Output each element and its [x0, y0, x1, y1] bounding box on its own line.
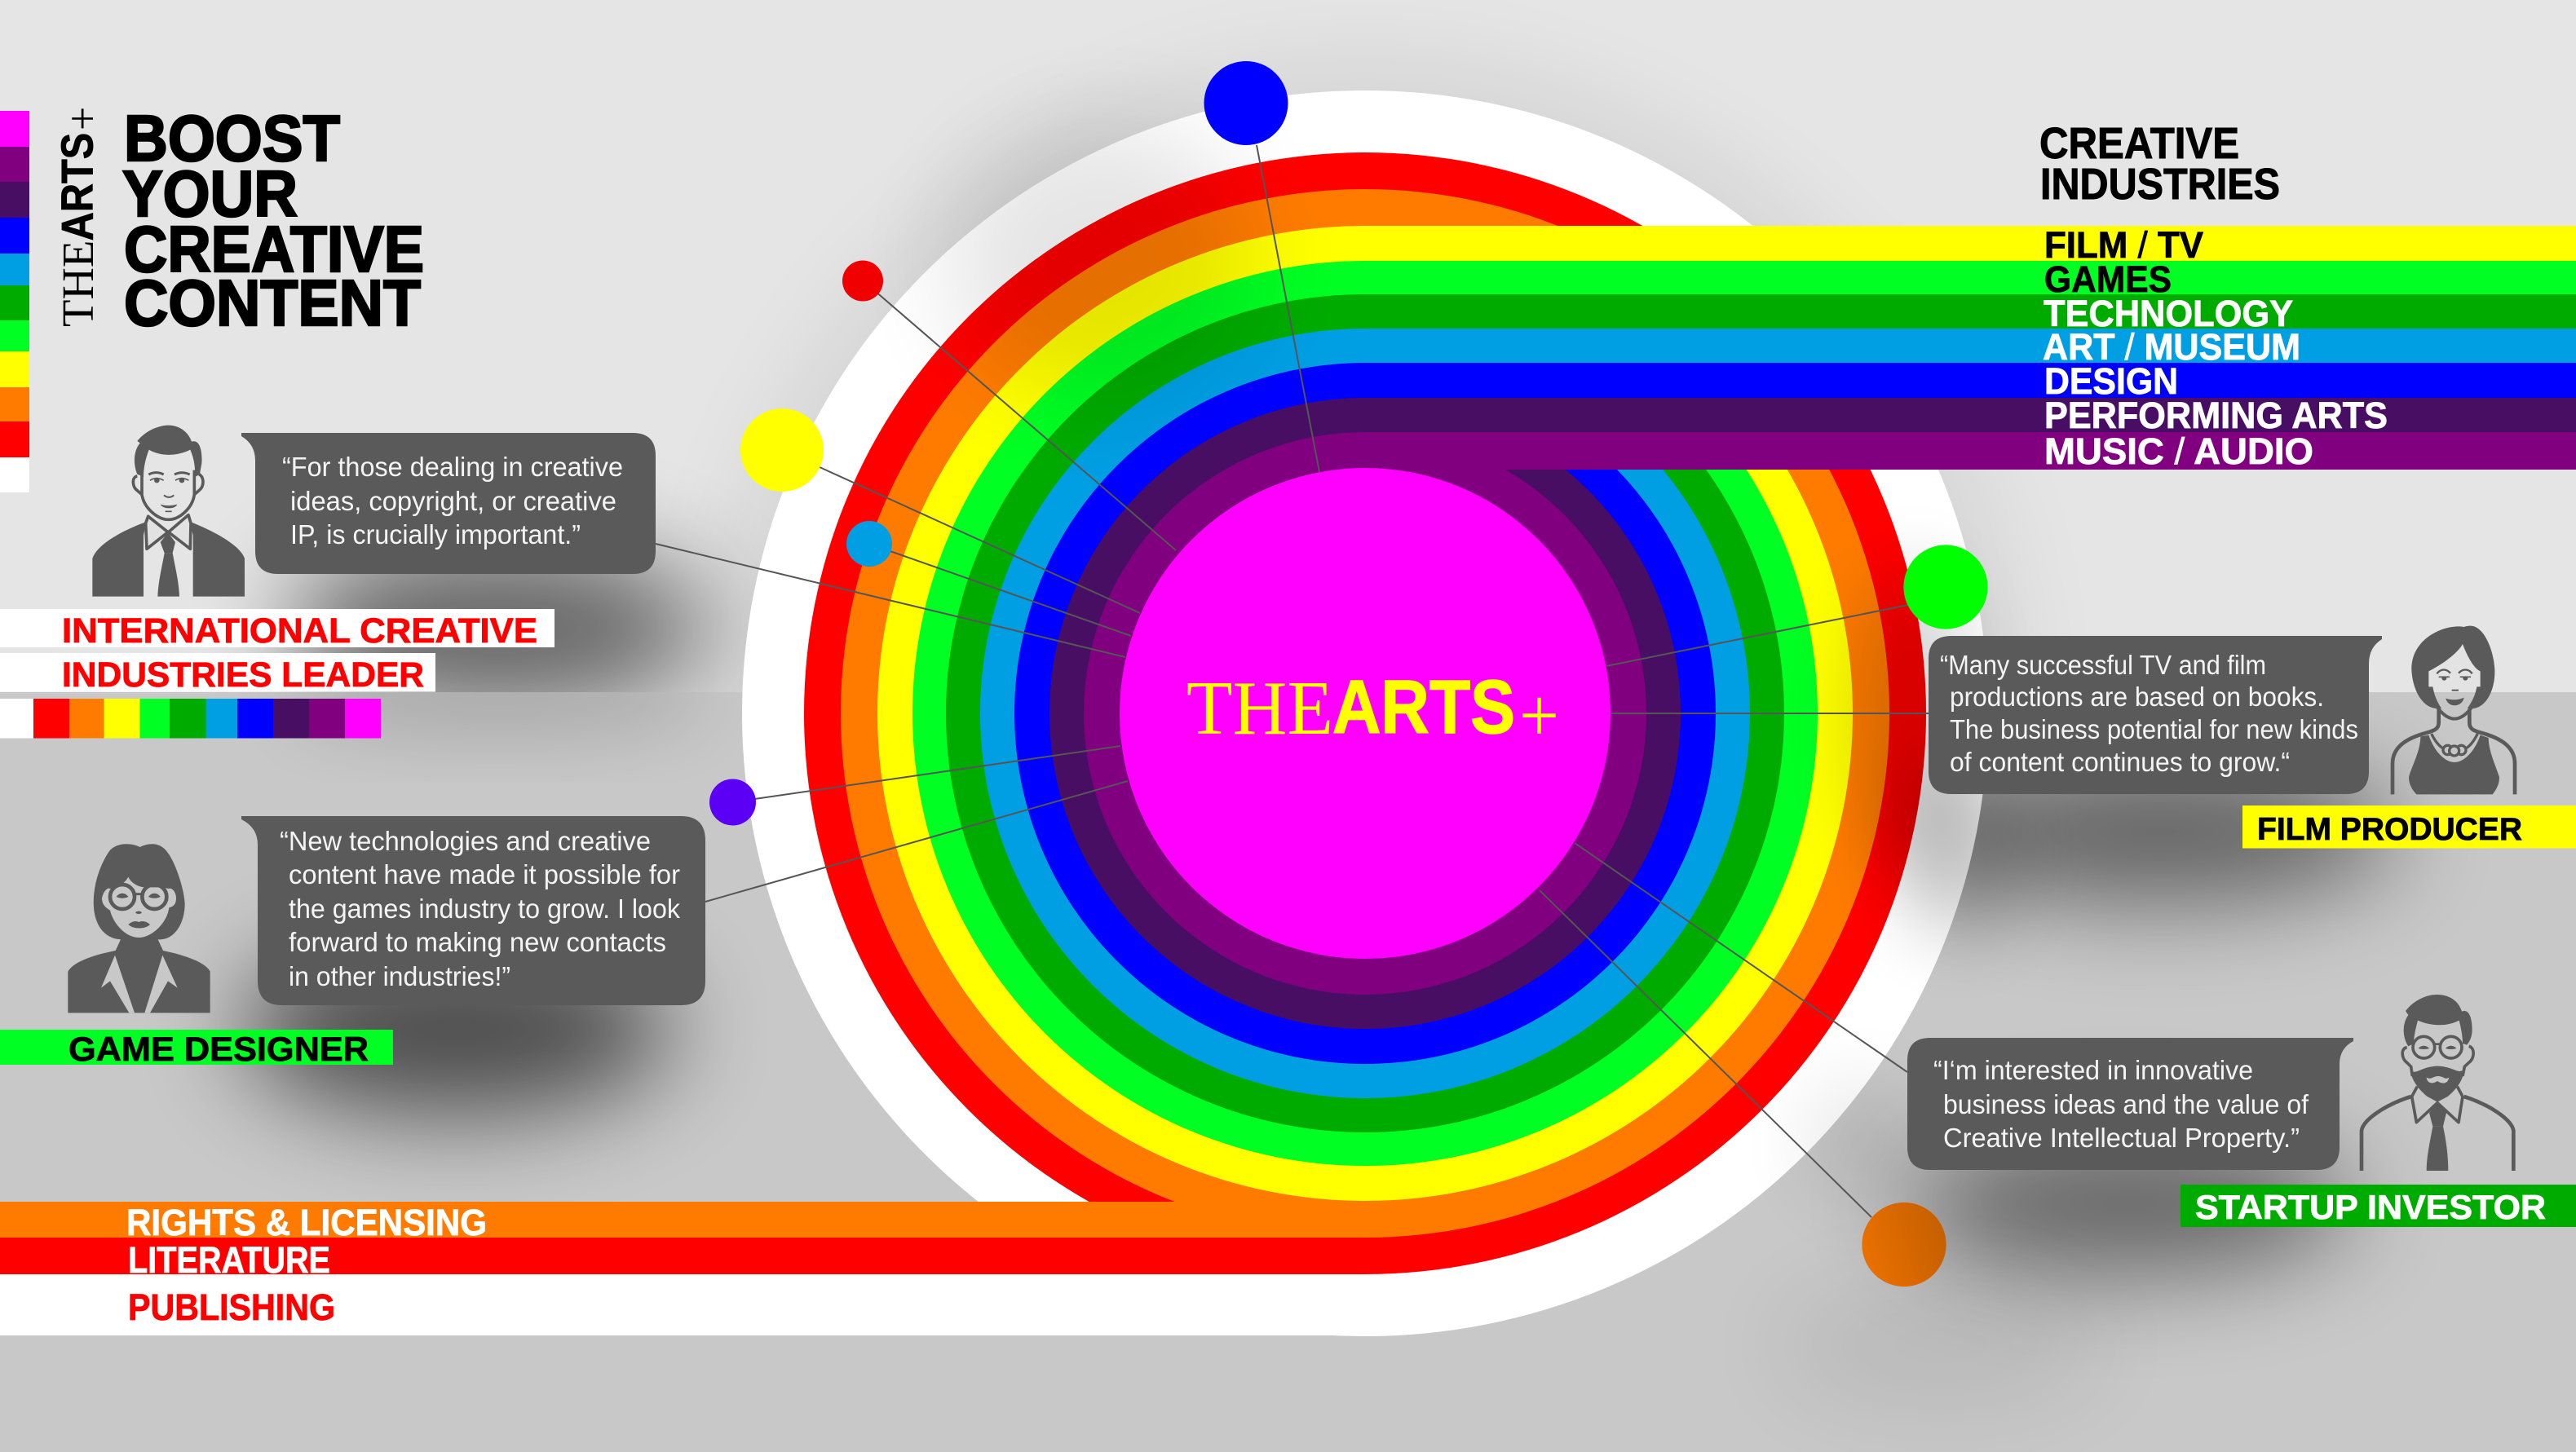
stripe labels: publishing group: RIGHTS & LICENSING: [126, 1202, 487, 1243]
quote text: The business potential for new kinds: [1950, 714, 2358, 744]
dot: blue: [1204, 61, 1288, 145]
role label: FILM PRODUCER: [2257, 812, 2522, 847]
speech bubble: [241, 433, 656, 574]
centre logo: +: [1519, 673, 1559, 758]
role label: [2242, 805, 2576, 848]
stripe labels: industries: TECHNOLOGY: [2044, 293, 2293, 334]
dot: red: [842, 261, 883, 302]
stripe labels: industries: FILM / TV: [2044, 224, 2203, 266]
stripe labels: publishing group: [126, 1202, 487, 1328]
quote text: “New technologies and creative: [280, 826, 651, 856]
stripes: creative industries bands: [1365, 226, 2576, 470]
role label: INDUSTRIES LEADER: [62, 655, 424, 695]
persona: startup investor: [1907, 995, 2576, 1227]
quote text: [280, 826, 680, 991]
soft shadows over rings: [946, 122, 2014, 1207]
quote text: [1933, 1055, 2309, 1153]
connector lines: [656, 145, 1929, 1217]
title: BOOST: [124, 102, 340, 174]
quote text: [1940, 650, 2358, 777]
speech bubble: [241, 816, 705, 1005]
icon: man with beard: [2362, 995, 2513, 1171]
icon: man in suit: [92, 426, 245, 597]
stripe labels: publishing group: LITERATURE: [128, 1239, 330, 1281]
background: lower darker panel: [0, 692, 2576, 1452]
quote text: of content continues to grow.“: [1950, 747, 2290, 777]
stripe labels: industries: DESIGN: [2044, 360, 2178, 402]
dot: light blue: [846, 521, 892, 567]
role label: STARTUP INVESTOR: [2195, 1188, 2546, 1226]
icon: woman with necklace: [2393, 626, 2515, 794]
quote text: “Many successful TV and film: [1940, 650, 2266, 680]
dot: orange: [1862, 1203, 1946, 1286]
background shadows lower panel: [241, 652, 2397, 1402]
stripe labels: publishing group: PUBLISHING: [128, 1286, 335, 1328]
quote text: “I‘m interested in innovative: [1933, 1055, 2253, 1085]
vertical logo: +: [57, 107, 108, 130]
heading: creative industries: INDUSTRIES: [2040, 160, 2280, 209]
quote text: “For those dealing in creative: [282, 452, 623, 482]
centre logo: [1186, 664, 1559, 758]
dot: green: [1903, 545, 1988, 629]
role label: GAME DESIGNER: [68, 1030, 369, 1068]
quote text: forward to making new contacts: [289, 927, 666, 957]
role label: [0, 609, 555, 695]
quote text: the games industry to grow. I look: [289, 894, 680, 924]
colour strip: [0, 699, 381, 739]
centre logo: THE: [1186, 666, 1333, 751]
dot: yellow: [740, 408, 824, 492]
speech bubble: [1907, 1038, 2353, 1170]
quote text: productions are based on books.: [1950, 682, 2324, 712]
speech bubble: [1929, 636, 2382, 794]
quote text: in other industries!”: [289, 961, 510, 991]
stripe labels: industries: MUSIC / AUDIO: [2044, 430, 2313, 472]
title: CREATIVE: [124, 213, 424, 285]
magenta centre disc: [1120, 468, 1611, 959]
stripe labels: industries: ART / MUSEUM: [2043, 326, 2300, 368]
persona: film producer: [1929, 626, 2576, 848]
role label: INTERNATIONAL CREATIVE: [62, 611, 537, 651]
background: upper light panel: [0, 0, 2576, 692]
title: [122, 102, 424, 339]
centre logo: ARTS: [1332, 664, 1515, 749]
vertical logo: [51, 107, 108, 327]
heading: creative industries: [2039, 119, 2280, 209]
stripe labels: industries: PERFORMING ARTS: [2044, 395, 2388, 436]
stripe labels: industries: [2043, 224, 2388, 472]
left colour key bar: [0, 111, 29, 492]
title: CONTENT: [124, 267, 421, 339]
persona: game designer: [0, 816, 705, 1068]
title: YOUR: [122, 157, 298, 230]
quote text: ideas, copyright, or creative: [290, 486, 616, 516]
icon: woman with glasses: [68, 844, 210, 1013]
vertical logo: THE: [53, 241, 104, 327]
stripes: bottom left bands: [0, 1202, 1365, 1335]
background shadows upper panel: [285, 61, 2017, 1366]
persona: international creative industries leader: [0, 426, 656, 739]
vertical logo: ARTS: [51, 133, 102, 241]
dot: violet: [709, 779, 756, 825]
quote text: [282, 452, 623, 549]
concentric rainbow rings: [742, 90, 1988, 1336]
stripe labels: industries: GAMES: [2044, 258, 2172, 300]
quote text: business ideas and the value of: [1943, 1089, 2309, 1119]
heading: creative industries: CREATIVE: [2039, 119, 2239, 168]
quote text: IP, is crucially important.”: [290, 519, 581, 549]
quote text: content have made it possible for: [289, 859, 680, 889]
quote text: Creative Intellectual Property.”: [1943, 1123, 2300, 1153]
